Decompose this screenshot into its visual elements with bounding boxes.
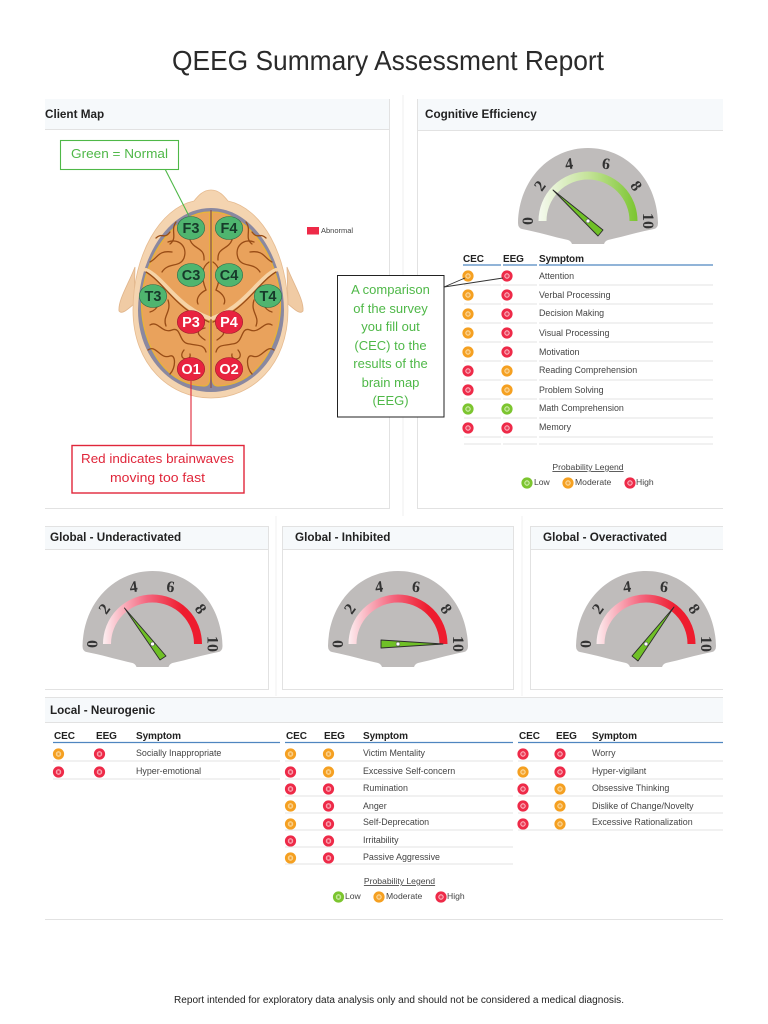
gauge: inhibited: 2 <box>341 601 360 618</box>
table: column 2: EEG <box>324 731 345 742</box>
callout: CEC vs EEG comparison: A comparison <box>351 282 430 297</box>
probability legend: Probability Legend <box>552 462 624 472</box>
heading: client map: Client Map <box>45 108 104 121</box>
table: column 3 <box>517 731 723 830</box>
callout: CEC vs EEG comparison: (CEC) to the <box>354 338 427 353</box>
callout: CEC vs EEG comparison: results of the <box>353 356 428 371</box>
table: cognitive symptoms: Motivation <box>539 347 580 357</box>
table: column 1: EEG <box>96 731 117 742</box>
table: cognitive symptoms: Symptom <box>539 254 584 265</box>
callout: CEC vs EEG comparison <box>338 276 503 417</box>
electrode sites: C4 <box>220 268 238 284</box>
callout: red too fast: Red indicates brainwaves <box>81 451 235 466</box>
gauge: underactivated: 2 <box>96 601 114 618</box>
electrode sites: O2 <box>219 362 239 378</box>
gauge: inhibited: 10 <box>449 636 466 652</box>
probability legend <box>333 876 465 903</box>
callout: CEC vs EEG comparison: you fill out <box>361 319 420 334</box>
gauge: cognitive efficiency: 8 <box>626 178 645 195</box>
gauge: cognitive efficiency: 2 <box>531 178 550 195</box>
electrode sites: P4 <box>220 315 238 331</box>
electrode sites: C3 <box>182 268 200 284</box>
table: cognitive symptoms: Memory <box>539 422 572 432</box>
gauge: overactivated: 8 <box>684 601 703 618</box>
brain diagram <box>119 190 303 398</box>
heading: global underactivated: Global - Underactivated <box>50 531 181 544</box>
gauge: inhibited: 0 <box>330 640 347 648</box>
table: column 3: Excessive Rationalization <box>592 817 693 827</box>
gauge: overactivated: 0 <box>578 640 595 648</box>
table: column 2: CEC <box>286 731 307 742</box>
gauge: cognitive efficiency: 6 <box>601 156 611 173</box>
callout: CEC vs EEG comparison: brain map <box>362 375 419 390</box>
gauge: underactivated: 4 <box>128 579 139 596</box>
gauge: inhibited <box>328 571 468 667</box>
electrode sites: F4 <box>221 221 237 237</box>
table: column 2: Irritability <box>363 835 399 845</box>
table: column 3: Hyper-vigilant <box>592 766 647 776</box>
table: cognitive symptoms: Visual Processing <box>539 328 609 338</box>
probability legend: Low <box>534 477 551 487</box>
electrode sites <box>139 216 282 380</box>
gauge: overactivated: 2 <box>589 601 608 618</box>
panel: local neurogenic <box>45 698 723 920</box>
table: column 2: Symptom <box>363 731 408 742</box>
probability legend: Moderate <box>386 891 423 901</box>
table: cognitive symptoms: Reading Comprehension <box>539 365 637 375</box>
heading: cognitive efficiency: Cognitive Efficiency <box>425 108 537 121</box>
gauge: overactivated: 4 <box>622 579 632 596</box>
table: column 3: Symptom <box>592 731 637 742</box>
legend: abnormal: Abnormal <box>321 226 353 235</box>
probability legend <box>521 462 654 489</box>
gauge: underactivated: 8 <box>191 601 209 618</box>
probability legend: Low <box>345 891 362 901</box>
gauge: underactivated: 6 <box>165 579 176 596</box>
title: QEEG Summary Assessment Report <box>172 45 604 76</box>
table: cognitive symptoms: Attention <box>539 271 574 281</box>
legend: abnormal <box>307 226 353 235</box>
electrode sites: T4 <box>260 289 276 305</box>
table: column 3: Obsessive Thinking <box>592 783 669 793</box>
callout: red too fast <box>72 381 244 493</box>
gauge: cognitive efficiency: 4 <box>564 156 574 173</box>
panel: global inhibited <box>282 526 514 690</box>
gauge: underactivated <box>82 571 222 667</box>
table: column 3: Dislike of Change/Novelty <box>592 801 694 811</box>
table: cognitive symptoms: EEG <box>503 254 524 265</box>
table: cognitive symptoms: Problem Solving <box>539 385 604 395</box>
table: column 2: Anger <box>363 801 387 811</box>
gauge: underactivated: 10 <box>204 636 220 652</box>
table: cognitive symptoms: Decision Making <box>539 308 604 318</box>
electrode sites: F3 <box>183 221 199 237</box>
footer note: Report intended for exploratory data analysis only and should not be considered a medical diagnosis. <box>174 995 624 1006</box>
panel: client map <box>45 99 390 508</box>
table: cognitive symptoms: Math Comprehension <box>539 403 624 413</box>
table: column 1: CEC <box>54 731 75 742</box>
gauge: overactivated: 6 <box>659 579 669 596</box>
gauge: inhibited: 4 <box>374 579 384 596</box>
table: column 1: Socially Inappropriate <box>136 748 221 758</box>
table: column 3: CEC <box>519 731 540 742</box>
table: column 1 <box>53 731 280 779</box>
panel: global overactivated <box>530 526 723 690</box>
gauge: underactivated: 0 <box>84 640 102 648</box>
gauge: cognitive efficiency <box>518 148 658 244</box>
gauge: cognitive efficiency: 0 <box>520 217 537 225</box>
callout: green normal <box>60 140 189 216</box>
table: column 2: Passive Aggressive <box>363 852 440 862</box>
table: column 2: Victim Mentality <box>363 748 426 758</box>
probability legend: High <box>447 891 465 901</box>
table: cognitive symptoms: CEC <box>463 254 484 265</box>
probability legend: High <box>636 477 654 487</box>
gauge: inhibited: 8 <box>436 601 455 618</box>
table: column 1: Symptom <box>136 731 181 742</box>
callout: CEC vs EEG comparison: of the survey <box>353 301 428 316</box>
panel: cognitive efficiency <box>417 99 723 508</box>
table: column 3: EEG <box>556 731 577 742</box>
electrode sites: P3 <box>182 315 200 331</box>
gauge: overactivated: 10 <box>697 636 714 652</box>
table: column 2: Self-Deprecation <box>363 817 429 827</box>
table: cognitive symptoms: Verbal Processing <box>539 290 611 300</box>
gauge: overactivated <box>576 571 716 667</box>
table: column 2: Excessive Self-concern <box>363 766 455 776</box>
table: column 2 <box>285 731 513 864</box>
table: column 3: Worry <box>592 748 616 758</box>
probability legend: Moderate <box>575 477 612 487</box>
gauge: inhibited: 6 <box>411 579 421 596</box>
table: column 2: Rumination <box>363 783 408 793</box>
probability legend: Probability Legend <box>364 876 435 886</box>
callout: red too fast: moving too fast <box>110 470 205 485</box>
callout: CEC vs EEG comparison: (EEG) <box>372 393 409 408</box>
electrode sites: O1 <box>181 362 201 378</box>
table: column 1: Hyper-emotional <box>136 766 201 776</box>
heading: global overactivated: Global - Overactivated <box>543 531 667 544</box>
electrode sites: T3 <box>145 289 161 305</box>
heading: global inhibited: Global - Inhibited <box>295 531 390 544</box>
table: cognitive symptoms <box>462 254 713 444</box>
callout: green normal: Green = Normal <box>71 146 168 161</box>
panel: global underactivated <box>45 526 268 690</box>
heading: local neurogenic: Local - Neurogenic <box>50 704 156 717</box>
gauge: cognitive efficiency: 10 <box>639 213 656 229</box>
